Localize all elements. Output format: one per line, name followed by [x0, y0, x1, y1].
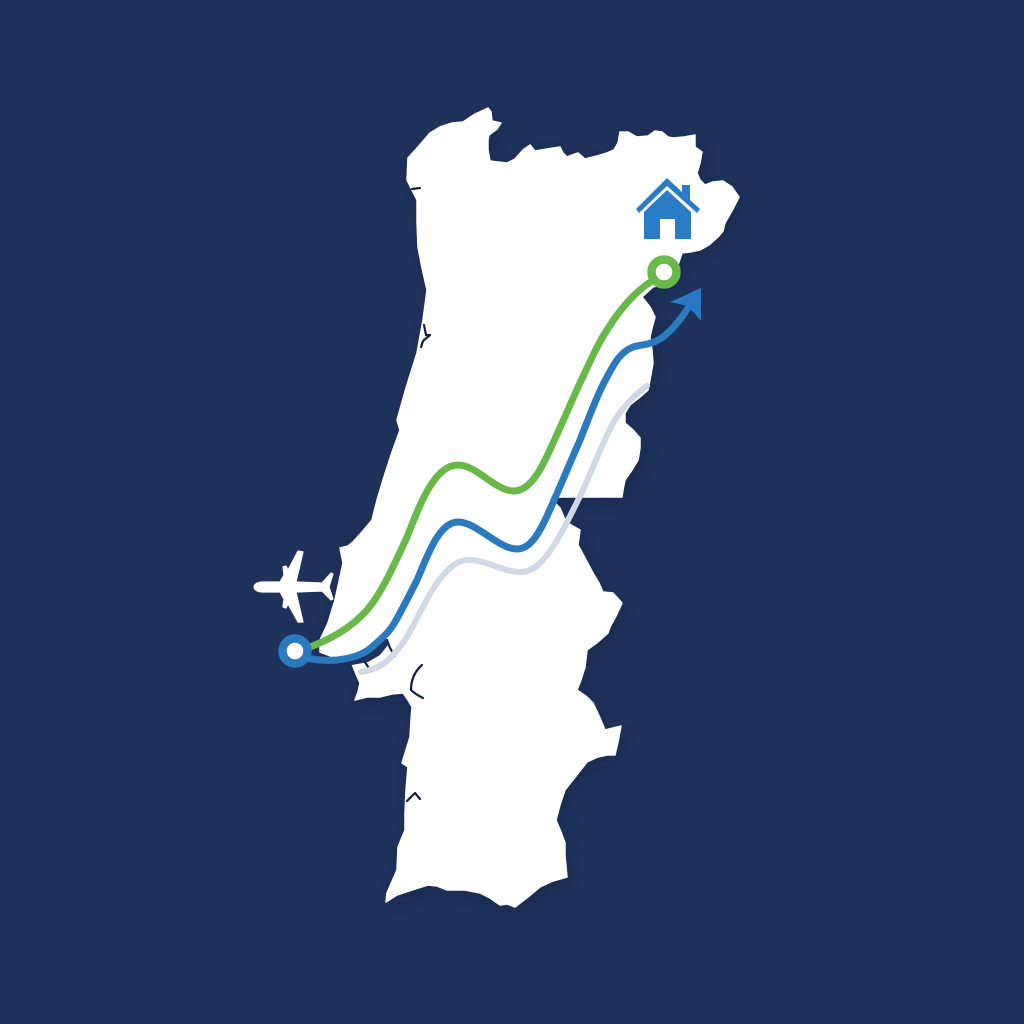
arrow head — [670, 288, 701, 321]
blue route line with arrow — [300, 288, 701, 660]
green route line — [310, 279, 655, 647]
estuary and coastal inlets — [365, 188, 430, 801]
origin marker — [282, 638, 308, 664]
small island — [507, 136, 517, 144]
icon: house — [636, 178, 700, 239]
destination marker — [652, 260, 676, 284]
light grey route line — [361, 386, 647, 672]
icon: airplane — [254, 551, 333, 622]
map of Portugal — [320, 108, 744, 913]
